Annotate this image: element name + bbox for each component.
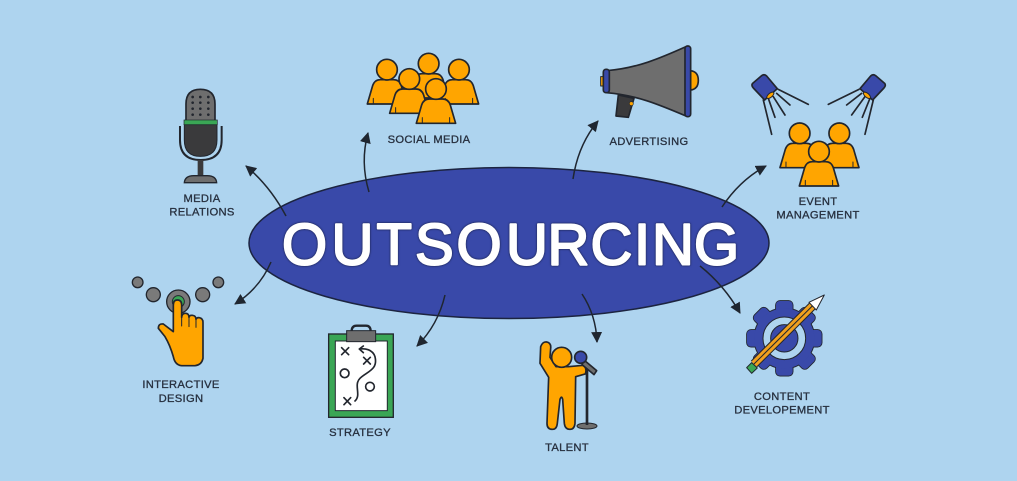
label: EVENT [799, 196, 837, 208]
icon: megaphone [601, 46, 698, 117]
icon: hand pressing button [132, 277, 224, 366]
icon: microphone [180, 89, 222, 183]
icon: gear and pencil [747, 295, 824, 376]
icon: singer with microphone stand [540, 342, 597, 429]
arrows from the ellipse to each service [235, 121, 766, 346]
panel: social media [367, 53, 479, 146]
panel: event management: MANAGEMENT [776, 210, 860, 222]
panel: advertising [601, 46, 698, 148]
label: MEDIA [184, 193, 221, 205]
icon: spotlights and people [752, 75, 885, 186]
label: STRATEGY [329, 427, 391, 439]
panel: media relations [169, 89, 235, 219]
label: ADVERTISING [610, 136, 688, 148]
label: TALENT [545, 442, 589, 454]
title: OUTSOURCING [282, 212, 739, 278]
icon: clipboard with play diagram [329, 326, 393, 417]
panel: interactive design [132, 277, 224, 405]
panel: event management [752, 75, 885, 222]
label: SOCIAL MEDIA [388, 134, 471, 146]
panel: content development [734, 295, 830, 416]
panel: strategy [329, 326, 393, 439]
label: INTERACTIVE [142, 379, 220, 391]
icon: group of people [367, 53, 479, 123]
label: CONTENT [754, 391, 810, 403]
panel: content development: DEVELOPEMENT [734, 404, 830, 416]
panel: talent [540, 342, 597, 454]
panel: interactive design: DESIGN [159, 393, 203, 405]
panel: media relations: RELATIONS [169, 206, 235, 218]
central ellipse with title [249, 168, 769, 318]
